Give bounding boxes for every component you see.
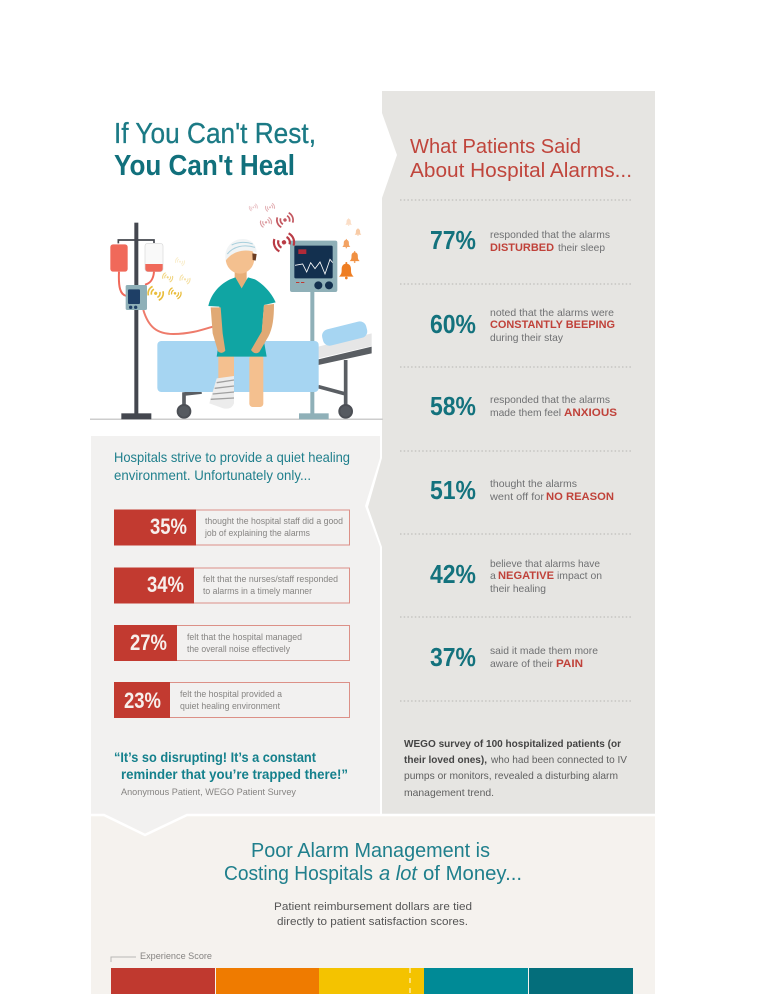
heading: poor alarm management: of Money... bbox=[423, 863, 522, 885]
legend: experience score: Experience Score bbox=[140, 951, 212, 962]
icon: monitor stand bbox=[299, 290, 329, 419]
arrow: down chevron outline bbox=[91, 815, 655, 835]
stat: 42% negative: NEGATIVE bbox=[498, 570, 554, 582]
ground line bbox=[90, 418, 383, 421]
stat: 77% disturbed: their sleep bbox=[558, 242, 605, 254]
title: If You Can't Rest, bbox=[114, 118, 316, 150]
survey note: their loved ones), bbox=[404, 754, 487, 766]
icon: IV tube to patient bbox=[143, 310, 213, 334]
arms bbox=[211, 307, 225, 353]
subheading: reimbursement: directly to patient satisfaction scores. bbox=[277, 916, 468, 928]
icon: pillow bbox=[321, 320, 369, 347]
stat bar: 35% bbox=[114, 510, 350, 546]
stat: 42% negative bbox=[430, 558, 602, 595]
stat: 37% pain: said it made them more bbox=[490, 645, 598, 657]
icon: monitor alarm signals bbox=[249, 203, 296, 252]
stat: 58% anxious bbox=[430, 391, 617, 421]
stat: 37% pain: 37% bbox=[430, 642, 476, 672]
stat bar: 27%: the overall noise effectively bbox=[187, 644, 290, 655]
legend: experience score bbox=[111, 951, 212, 962]
head bandage bbox=[225, 239, 257, 261]
stat: 60% constantly beeping: CONSTANTLY BEEPING bbox=[490, 319, 615, 331]
stat bar: 34%: to alarms in a timely manner bbox=[203, 586, 312, 597]
stat: 51% no reason: went off for bbox=[489, 491, 545, 503]
stat bar: 27%: felt that the hospital managed bbox=[187, 632, 302, 643]
heading: poor alarm management: Poor Alarm Management is bbox=[251, 840, 490, 862]
icon: IV pole bbox=[118, 223, 154, 419]
survey note: pumps or monitors, revealed a disturbing alarm bbox=[404, 770, 618, 782]
heading: poor alarm management: Costing Hospitals bbox=[224, 863, 373, 885]
illustration: patient on hospital bed with alarms bbox=[90, 203, 383, 420]
stat bar: 35%: 35% bbox=[150, 514, 187, 539]
title: You Can't Heal bbox=[114, 150, 295, 182]
neck and head bbox=[235, 268, 247, 288]
icon: mattress bbox=[157, 341, 319, 392]
stat bar: 27%: 27% bbox=[130, 630, 167, 655]
icon: patient bbox=[208, 239, 276, 409]
icon: pump alarm signals bbox=[147, 257, 191, 301]
scrubs bbox=[208, 277, 276, 357]
chart: experience score bar bbox=[111, 968, 633, 994]
stat: 58% anxious: 58% bbox=[430, 391, 476, 421]
stat: 60% constantly beeping: 60% bbox=[430, 309, 476, 339]
stat: 51% no reason: 51% bbox=[430, 475, 476, 505]
stat: 51% no reason bbox=[430, 475, 614, 505]
stat: 37% pain: PAIN bbox=[556, 658, 583, 670]
stat bar: 34% bbox=[114, 568, 350, 604]
stat: 37% pain: aware of their bbox=[490, 658, 553, 670]
subheading: reimbursement bbox=[274, 901, 472, 928]
patient quote bbox=[114, 749, 348, 798]
patient quote: reminder that you’re trapped there!” bbox=[121, 766, 348, 782]
survey note: management trend. bbox=[404, 787, 494, 799]
stat bar: 35%: thought the hospital staff did a good bbox=[205, 516, 343, 527]
survey note: who had been connected to IV bbox=[490, 754, 627, 766]
panel: right survey results bbox=[368, 91, 655, 814]
icon: IV bags bbox=[110, 243, 163, 296]
stat: 77% disturbed bbox=[430, 225, 610, 255]
stat: 60% constantly beeping: during their stay bbox=[490, 332, 564, 344]
panel: left quiet healing bbox=[91, 436, 380, 833]
stat bar: 34%: 34% bbox=[147, 572, 184, 597]
stat: 42% negative: their healing bbox=[490, 583, 546, 595]
survey note: WEGO survey of 100 hospitalized patients (or bbox=[404, 738, 621, 750]
survey note bbox=[404, 738, 627, 799]
icon: alarm bells bbox=[339, 218, 361, 279]
stat: 42% negative: impact on bbox=[557, 570, 602, 582]
heading: poor alarm management: a lot bbox=[379, 863, 418, 885]
panel: bottom section bbox=[91, 816, 655, 994]
stat: 77% disturbed: DISTURBED bbox=[490, 242, 554, 254]
stat bar: 27% bbox=[114, 625, 350, 661]
patient quote: Anonymous Patient, WEGO Patient Survey bbox=[121, 787, 296, 798]
stat: 42% negative: 42% bbox=[430, 559, 476, 589]
heading: quiet healing: Hospitals strive to provide a quiet healing bbox=[114, 449, 350, 465]
heading: quiet healing: environment. Unfortunately only... bbox=[114, 467, 311, 483]
stat: 77% disturbed: 77% bbox=[430, 225, 476, 255]
stat: 58% anxious: made them feel bbox=[490, 407, 561, 419]
stat: 60% constantly beeping bbox=[430, 307, 615, 344]
heading: what patients said: What Patients Said bbox=[410, 136, 581, 158]
title bbox=[114, 118, 316, 182]
icon: IV pump bbox=[126, 285, 147, 310]
stat: 58% anxious: responded that the alarms bbox=[490, 394, 610, 406]
stat: 51% no reason: thought the alarms bbox=[490, 478, 577, 490]
heading: what patients said bbox=[410, 136, 632, 182]
stat bar: 35%: job of explaining the alarms bbox=[204, 528, 310, 539]
stat bar: 23%: 23% bbox=[124, 688, 161, 713]
stat bar: 23%: quiet healing environment bbox=[180, 701, 280, 712]
stat: 58% anxious: ANXIOUS bbox=[564, 407, 617, 419]
subheading: reimbursement: Patient reimbursement dollars are tied bbox=[274, 901, 472, 913]
stat: 37% pain bbox=[430, 642, 598, 672]
patient quote: “It’s so disrupting! It’s a constant bbox=[114, 749, 316, 765]
heading: poor alarm management bbox=[224, 840, 522, 885]
stat bar: 34%: felt that the nurses/staff responded bbox=[203, 574, 338, 585]
leg cast bbox=[209, 376, 234, 409]
stat: 77% disturbed: responded that the alarms bbox=[490, 229, 610, 241]
stat: 51% no reason: NO REASON bbox=[546, 491, 614, 503]
icon: bed frame and wheels bbox=[177, 333, 372, 419]
stat bar: 23% bbox=[114, 682, 350, 718]
stat bar: 23%: felt the hospital provided a bbox=[180, 689, 283, 700]
stat: 42% negative: believe that alarms have bbox=[490, 558, 600, 570]
stat: 42% negative: a bbox=[490, 570, 496, 582]
heading: quiet healing bbox=[114, 449, 350, 483]
icon: monitor bbox=[290, 241, 337, 292]
legs bbox=[218, 355, 234, 382]
heading: what patients said: About Hospital Alarms... bbox=[410, 160, 632, 182]
stat: 60% constantly beeping: noted that the alarms were bbox=[490, 307, 614, 319]
